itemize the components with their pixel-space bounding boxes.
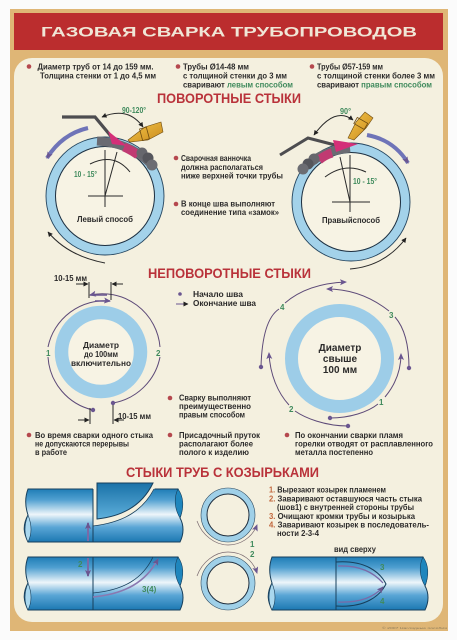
diagram: small ring top — [197, 488, 257, 545]
note: weld pool: должна располагаться — [181, 162, 263, 172]
dimension: top 10-15 mm: 10-15 мм — [54, 273, 87, 283]
label: top view: вид сверху — [334, 544, 376, 554]
angle marks — [88, 113, 143, 207]
steps list: 3. Очищают кромки трубы и козырька — [269, 511, 415, 521]
diagram: pipe over 100 mm — [259, 282, 411, 428]
travel direction arrow — [47, 128, 88, 158]
diagram: right method: 10 - 15° — [353, 176, 377, 186]
weld bead — [298, 148, 350, 174]
visor outline — [336, 562, 386, 606]
note: right method: Сварку выполняют — [179, 392, 251, 402]
intro text column 3: сваривают правым способом — [317, 80, 432, 90]
diagram: pipe up to 100 mm: 2 — [156, 349, 161, 358]
diagram: pipe over 100 mm: 2 — [289, 405, 294, 414]
copyright: © 2007 Наглядные пособия — [382, 626, 448, 630]
diagram: pipe over 100 mm: 4 — [280, 303, 285, 312]
steps list: 2. Заваривают оставшуюся часть стыка — [269, 494, 422, 504]
note: weld pool — [174, 153, 283, 180]
note: no interruptions: Во время сварки одного стыка — [35, 430, 153, 440]
note: lock joint: соединение типа «замок» — [181, 207, 279, 217]
intro text column 2: сваривают левым способом — [183, 80, 293, 90]
heading: visor joints: СТЫКИ ТРУБ С КОЗЫРЬКАМИ — [126, 465, 319, 480]
intro text column 2 — [176, 62, 293, 90]
diagram: left method — [46, 105, 164, 263]
note: right method: преимущественно — [179, 401, 251, 411]
note: weld pool: ниже верхней точки трубы — [181, 170, 283, 180]
steps list: ности 2-3-4 — [277, 528, 319, 538]
ring labels: 2 — [250, 550, 255, 559]
diagram: welded pipe: 2 — [78, 560, 83, 569]
intro text column 2: Трубы Ø14-48 мм — [183, 62, 249, 72]
intro text column 1 — [27, 62, 156, 80]
ring labels: 1 — [250, 540, 255, 549]
intro text column 2: с толщиной стенки до 3 мм — [183, 70, 287, 80]
diagram: right method: Правыйспособ — [322, 215, 380, 225]
diagram: pipe up to 100 mm: включительно — [71, 358, 131, 368]
diagram: pipe over 100 mm: Диаметр — [319, 343, 361, 354]
diagram: left method: 90-120° — [122, 105, 146, 115]
note: filler rod: Присадочный пруток — [179, 430, 261, 440]
legend: Окончание шва — [193, 298, 256, 308]
note: flame withdrawal — [285, 430, 433, 457]
legend — [176, 289, 256, 308]
weld bead — [97, 141, 158, 170]
note: lock joint: В конце шва выполняют — [181, 198, 275, 208]
arrow — [87, 523, 89, 541]
note: no interruptions: в работе — [35, 447, 67, 457]
intro text column 1: Толщина стенки от 1 до 4,5 мм — [40, 70, 156, 80]
title banner: ГАЗОВАЯ СВАРКА ТРУБОПРОВОДОВ — [41, 24, 417, 40]
intro text column 1: Диаметр труб от 14 до 159 мм. — [38, 62, 154, 72]
diagram: top view pipe — [268, 557, 428, 610]
ring labels — [250, 540, 255, 559]
angle marks — [314, 115, 370, 212]
diagram: top view pipe: 3 — [380, 563, 385, 572]
diagram: pipe up to 100 mm — [46, 294, 161, 412]
diagram: left method: Левый способ — [77, 214, 133, 224]
note: filler rod: полого к изделию — [179, 447, 249, 457]
diagram: pipe up to 100 mm: 1 — [46, 349, 51, 358]
torch — [62, 117, 163, 146]
note: no interruptions: не допускаются перерывы — [35, 438, 129, 448]
intro text column 3: с толщиной стенки более 3 мм — [317, 70, 435, 80]
diagram: welded pipe — [24, 557, 183, 610]
note: weld pool: Сварочная ванночка — [181, 153, 251, 163]
diagram: left method: 10 - 15° — [74, 169, 97, 179]
steps list: 4. Заваривают козырек в последователь- — [269, 520, 429, 530]
note: filler rod: располагают более — [179, 438, 253, 448]
note: lock joint — [174, 198, 279, 217]
steps list: 1. Вырезают козырек пламенем — [269, 484, 386, 494]
note: right method — [168, 392, 251, 420]
diagram: welded pipe: 3(4) — [142, 585, 157, 594]
title banner — [14, 13, 443, 50]
diagram: pipe over 100 mm: свыше — [323, 354, 358, 365]
note: no interruptions — [27, 430, 153, 457]
visor — [97, 483, 153, 519]
diagram: pipe up to 100 mm: Диаметр — [83, 340, 119, 350]
note: flame withdrawal: металла постепенно — [295, 447, 373, 457]
diagram: right method: 90° — [340, 106, 351, 116]
note: flame withdrawal: горелки отводят от расплавленного — [295, 438, 433, 448]
weld arcs — [48, 294, 160, 412]
weld arcs — [259, 282, 411, 428]
note: right method: правым способом — [179, 410, 245, 420]
heading: fixed joints: НЕПОВОРОТНЫЕ СТЫКИ — [148, 266, 311, 281]
diagram: pipe over 100 mm: 1 — [379, 398, 384, 407]
diagram: top view pipe: 4 — [380, 597, 385, 606]
legend: Начало шва — [193, 289, 243, 299]
steps list — [269, 484, 429, 538]
intro text column 3: Трубы Ø57-159 мм — [317, 62, 383, 72]
intro text column 3 — [310, 62, 435, 90]
diagram: pipe over 100 mm: 3 — [389, 311, 394, 320]
note: filler rod — [168, 430, 261, 457]
diagram: pipe up to 100 mm: до 100мм — [84, 349, 118, 359]
dimension: bottom 10-15 mm — [78, 405, 151, 424]
diagram: pipe over 100 mm: 100 мм — [323, 365, 357, 376]
travel direction arrow — [367, 135, 408, 163]
torch — [280, 112, 373, 155]
diagram: small ring bottom — [197, 552, 257, 610]
rotation arrow — [48, 232, 105, 263]
dimension: top 10-15 mm — [54, 273, 123, 300]
heading: rotating joints: ПОВОРОТНЫЕ СТЫКИ — [157, 91, 301, 106]
note: flame withdrawal: По окончании сварки пламя — [295, 430, 403, 440]
steps list: (шов1) с внутренней стороны трубы — [277, 502, 414, 512]
diagram: right method — [280, 106, 410, 269]
diagram: pipe with cut visor — [24, 483, 183, 542]
rotation arrow — [350, 238, 406, 269]
dimension: bottom 10-15 mm: 10-15 мм — [118, 411, 151, 421]
